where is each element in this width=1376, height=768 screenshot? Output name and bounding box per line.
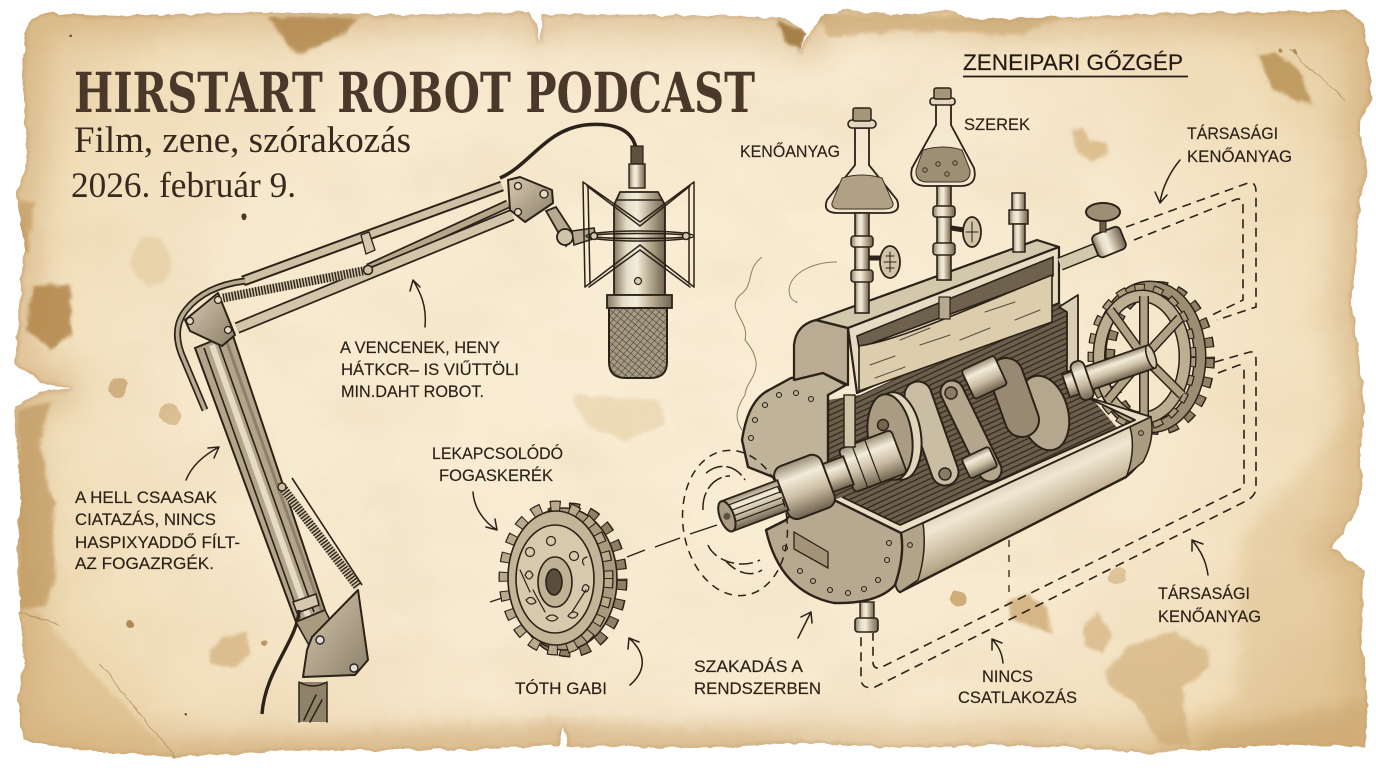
label: disconnecting gear: FOGASKERÉK bbox=[439, 466, 554, 485]
main shaft segments bbox=[710, 425, 909, 545]
neck bbox=[817, 456, 854, 494]
arrow: to gear from name bbox=[628, 638, 642, 685]
label: no connection: CSATLAKOZÁS bbox=[958, 688, 1077, 707]
trough cylinder bbox=[895, 417, 1151, 592]
lower rail continuation bbox=[296, 610, 345, 665]
arrow: to dashed line from no connection bbox=[992, 639, 1003, 663]
label: lower arm note: CIATAZÁS, NINCS bbox=[75, 510, 216, 529]
box end bbox=[794, 320, 848, 385]
icon: steam engine cutaway bbox=[710, 193, 1161, 632]
label: boom arm note bbox=[340, 338, 519, 401]
mic grille bbox=[609, 308, 667, 378]
elbow plate bbox=[185, 293, 235, 346]
date: 2026. február 9. bbox=[71, 165, 296, 205]
icon: small decorated gear bbox=[505, 507, 620, 650]
arm clamp bbox=[293, 594, 319, 613]
upper spring bbox=[223, 266, 372, 298]
connecting rod 1 bbox=[918, 395, 951, 480]
box frame bbox=[848, 247, 1059, 393]
arrow: to lower arm bbox=[186, 447, 219, 480]
label: break in system: SZAKADÁS A bbox=[694, 657, 804, 676]
label: boom arm note: A VENCENEK, HENY bbox=[340, 338, 500, 357]
mount swivel bbox=[546, 207, 596, 246]
lower arm rails bbox=[195, 333, 325, 622]
trough rim bbox=[834, 396, 1151, 533]
mic cable bbox=[500, 124, 636, 178]
axis line: gear to shaft bbox=[490, 525, 717, 602]
arrow: to small gear bbox=[473, 492, 497, 530]
dashed line: top loop bbox=[1126, 183, 1256, 320]
shock mount bbox=[583, 182, 694, 287]
icon: microphone boom arm bbox=[177, 177, 553, 722]
label: name: TÓTH GABI bbox=[515, 679, 607, 698]
icon: studio microphone bbox=[500, 124, 694, 378]
icon: large rear gear bbox=[1093, 287, 1208, 428]
label: break in system: RENDSZERBEN bbox=[694, 679, 821, 698]
icon: lubricant flask bbox=[826, 108, 900, 313]
label: lower arm note bbox=[75, 488, 240, 573]
rear stub pipe bbox=[1009, 193, 1028, 252]
rear crank disc bbox=[1006, 370, 1077, 456]
steam squiggles bbox=[735, 257, 837, 430]
arrow: to engine from break bbox=[798, 612, 812, 638]
floral ornament bbox=[520, 536, 589, 621]
subtitle: Film, zene, szórakozás bbox=[74, 120, 411, 161]
label: disconnecting gear: LEKAPCSOLÓDÓ bbox=[432, 444, 563, 463]
engine interior bbox=[828, 303, 1136, 533]
lower spring bbox=[278, 478, 362, 587]
spline bbox=[715, 480, 789, 534]
upper arm rails bbox=[237, 186, 512, 328]
stand post bbox=[299, 636, 358, 722]
base plate bbox=[303, 590, 368, 677]
top plate bbox=[508, 177, 553, 222]
mic collar bbox=[607, 200, 672, 308]
label: social lubricant top: KENŐANYAG bbox=[1187, 147, 1292, 166]
label: social lubricant bottom: KENŐANYAG bbox=[1158, 607, 1261, 626]
label: no connection bbox=[958, 667, 1077, 707]
box top face bbox=[816, 240, 1059, 328]
right shaft bbox=[1059, 336, 1161, 405]
rear post bbox=[1059, 295, 1078, 372]
label: social lubricant top bbox=[1187, 124, 1292, 166]
collar bbox=[771, 452, 838, 522]
label: social lubricant bottom: TÁRSASÁGI bbox=[1158, 584, 1250, 603]
name plate bbox=[794, 532, 828, 568]
arrow: to boom arm bbox=[410, 280, 425, 327]
label: boom arm note: MIN.DAHT ROBOT. bbox=[341, 382, 484, 401]
gear spokes bbox=[1108, 296, 1182, 418]
title: HIRSTART ROBOT PODCAST bbox=[74, 60, 755, 125]
label: boom arm note: HÁTKCR– IS VIŰTTÖLI bbox=[341, 360, 519, 379]
front disc upper bbox=[742, 373, 846, 477]
label: lubricant: KENŐANYAG bbox=[740, 142, 840, 161]
support pipe bbox=[844, 395, 855, 447]
label: break in system bbox=[694, 657, 821, 698]
arrow: to lower dashed line bbox=[1192, 540, 1208, 575]
lower rivets bbox=[782, 540, 892, 596]
arrow: to top dashed line bbox=[1155, 160, 1180, 203]
label: disconnecting gear bbox=[432, 444, 563, 485]
dashed line: lower loop bbox=[861, 352, 1256, 688]
left crank disc bbox=[862, 389, 927, 483]
label: lower arm note: HASPIXYADDŐ FÍLT- bbox=[75, 533, 240, 552]
right valve pipe bbox=[1060, 203, 1127, 264]
wooden block bbox=[859, 275, 1052, 391]
label: social lubricant bottom bbox=[1158, 584, 1261, 626]
elbow cable bbox=[177, 281, 245, 410]
upper arm clamp bbox=[361, 232, 375, 254]
label: no connection: NINCS bbox=[982, 667, 1033, 686]
arm cable bbox=[262, 610, 299, 714]
label: social lubricant top: TÁRSASÁGI bbox=[1187, 124, 1278, 143]
bottom drain pipe bbox=[855, 602, 878, 632]
dashed circle: shaft vibration bbox=[673, 443, 797, 603]
icon: chemicals flask bbox=[911, 88, 981, 280]
mic body bbox=[614, 192, 665, 295]
label: lower arm note: AZ FOGAZRGÉK. bbox=[75, 554, 214, 573]
box window bbox=[857, 257, 1053, 348]
heading: musical steam engine: ZENEIPARI GŐZGÉP bbox=[963, 50, 1183, 75]
left journal bbox=[838, 430, 907, 493]
dashed line: vertical stub bbox=[1008, 540, 1010, 600]
trough bands bbox=[895, 417, 1152, 592]
front disc lower bbox=[766, 500, 902, 603]
label: chemicals: SZEREK bbox=[964, 115, 1031, 134]
lower journal bbox=[961, 446, 998, 479]
upper rivets bbox=[748, 390, 814, 440]
mic connector bbox=[629, 146, 645, 188]
connecting rod 2 bbox=[945, 387, 990, 470]
middle crank journal bbox=[961, 355, 1007, 400]
label: lower arm note: A HELL CSAASAK bbox=[75, 488, 218, 507]
